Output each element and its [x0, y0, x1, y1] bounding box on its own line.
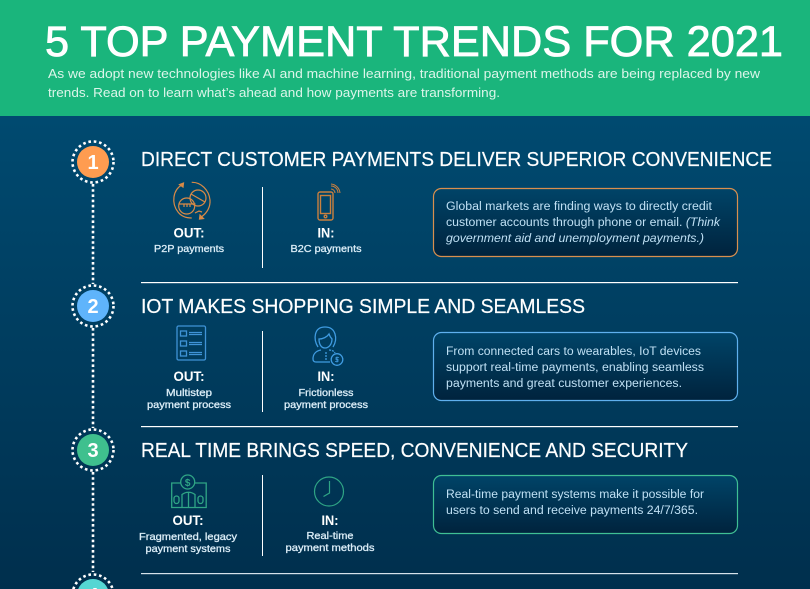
callout 2: From connected cars to wearables, IoT devices — [446, 346, 701, 358]
callout 2: support real-time payments, enabling seamless — [446, 362, 704, 374]
IN label 1: IN: — [318, 224, 334, 240]
IN label 2: IN: — [318, 368, 334, 384]
IN description 3: Real-time — [306, 530, 354, 542]
IN label 3: IN: — [322, 512, 338, 528]
section divider 1 — [141, 282, 738, 283]
callout 1: customer accounts through phone or email. (Think — [446, 217, 721, 229]
OUT label 2: OUT: — [174, 368, 204, 384]
callout 3: users to send and receive payments 24/7/365. — [446, 505, 698, 517]
OUT description 1: P2P payments — [154, 243, 224, 255]
OUT description 3: Fragmented, legacy — [139, 531, 238, 543]
OUT description 3 — [139, 531, 238, 555]
icon: bank building with dollar — [172, 475, 206, 508]
divider 1 — [262, 187, 264, 268]
title: 5 TOP PAYMENT TRENDS FOR 2021 — [45, 18, 783, 66]
icon: woman with dollar coin — [313, 327, 343, 365]
icon: people exchanging payments — [174, 182, 210, 219]
IN description 2: payment process — [284, 399, 368, 411]
callout 3 — [434, 476, 738, 534]
callout 2 — [434, 332, 738, 400]
section divider 2 — [141, 426, 738, 427]
section 1 — [72, 142, 772, 268]
section 3 — [72, 430, 738, 556]
number badge 1: 1 — [87, 152, 99, 174]
heading 1: DIRECT CUSTOMER PAYMENTS DELIVER SUPERIOR CONVENIENCE — [141, 149, 772, 171]
number badge 4 (cropped) — [72, 574, 114, 589]
header band — [0, 0, 810, 116]
OUT description 2: Multistep — [166, 387, 212, 399]
callout 3: Real-time payment systems make it possible for — [446, 489, 704, 501]
IN description 2 — [284, 387, 368, 411]
OUT description 3: payment systems — [146, 543, 230, 555]
callout 1 — [434, 188, 738, 256]
IN description 2: Frictionless — [298, 387, 354, 399]
intro text — [48, 67, 761, 100]
section 2 — [72, 286, 738, 412]
callout 1: Global markets are finding ways to directly credit — [446, 201, 713, 213]
IN description 3: payment methods — [286, 542, 374, 554]
icon: smartphone with signal — [318, 184, 340, 220]
icon: numbered checklist — [177, 326, 206, 360]
heading 3: REAL TIME BRINGS SPEED, CONVENIENCE AND SECURITY — [141, 440, 688, 462]
OUT description 2: payment process — [147, 399, 231, 411]
OUT label 1: OUT: — [174, 224, 204, 240]
callout 1: government aid and unemployment payments.) — [446, 233, 704, 245]
OUT description 2 — [147, 387, 231, 411]
icon: bank building with dollar: $ — [185, 478, 191, 489]
section divider 3 — [141, 573, 738, 574]
heading 2: IOT MAKES SHOPPING SIMPLE AND SEAMLESS — [141, 296, 585, 318]
intro text: As we adopt new technologies like AI and machine learning, traditional payment methods are being replaced by new — [48, 67, 761, 81]
OUT label 3: OUT: — [172, 512, 204, 528]
divider 2 — [262, 331, 264, 412]
IN description 3 — [286, 530, 374, 554]
number badge 1 — [72, 142, 114, 182]
number badge 2: 2 — [87, 296, 99, 318]
number badge 3 — [72, 430, 114, 470]
icon: clock — [314, 477, 344, 506]
number badge 2 — [72, 286, 114, 326]
callout 2: payments and great customer experiences. — [446, 378, 682, 390]
intro text: trends. Read on to learn what’s ahead and how payments are transforming. — [48, 86, 500, 100]
divider 3 — [262, 475, 264, 556]
timeline dotted line — [92, 184, 94, 572]
IN description 1: B2C payments — [290, 243, 362, 255]
number badge 3: 3 — [87, 440, 99, 462]
